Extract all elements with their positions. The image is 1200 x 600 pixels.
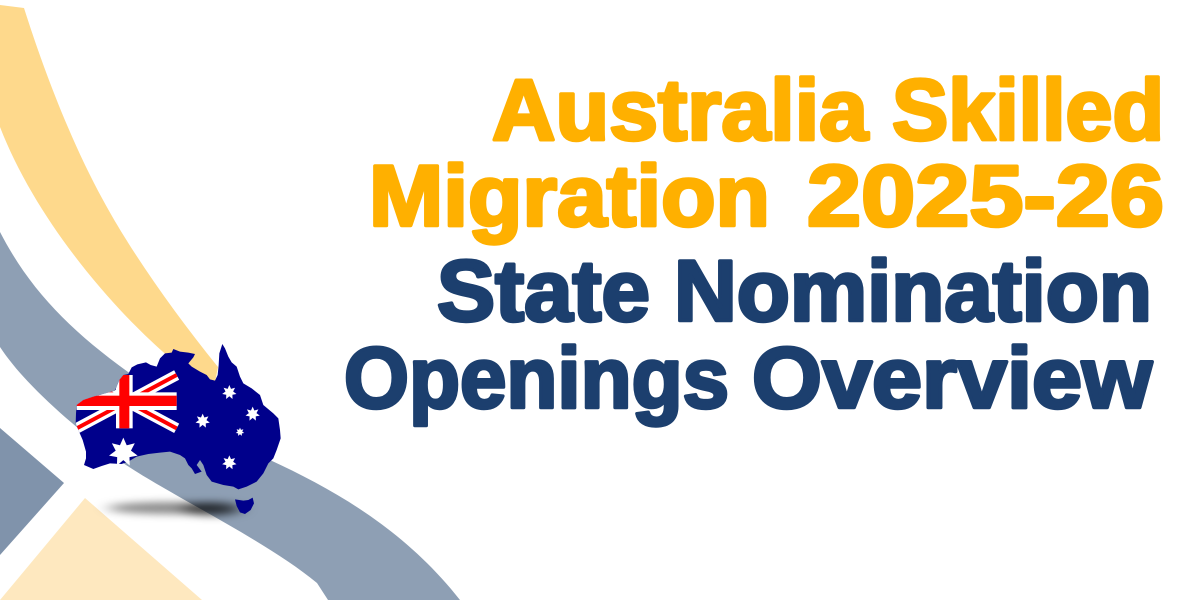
subheading line 2 (344, 330, 1153, 426)
heading line 2: 2025-26 (807, 148, 1164, 244)
Southern Cross stars (196, 385, 260, 469)
subheading line 1 (437, 244, 1152, 340)
subheading line 2: Openings (344, 330, 729, 426)
heading line 2 (369, 148, 1164, 244)
subheading: navy (344, 244, 1153, 426)
yellow curved ribbon (0, 5, 218, 382)
mainland silhouette (76, 344, 281, 489)
heading line 1: Australia (492, 62, 869, 158)
heading line 2: Migration (369, 148, 770, 244)
subheading line 2: Overview (752, 330, 1153, 426)
cream triangle (0, 498, 202, 600)
subheading line 1: State (437, 244, 650, 340)
map: Australia with flag (76, 344, 281, 514)
heading line 1: Skilled (892, 62, 1164, 158)
grey triangle (0, 428, 64, 555)
map shadow (108, 502, 242, 516)
heading: gold (369, 62, 1164, 244)
grey-blue curved ribbon (0, 232, 460, 600)
heading line 1 (492, 62, 1164, 158)
subheading line 1: Nomination (674, 244, 1152, 340)
Commonwealth star (109, 438, 138, 466)
Union Jack canton (77, 375, 177, 428)
Tasmania (235, 498, 254, 514)
